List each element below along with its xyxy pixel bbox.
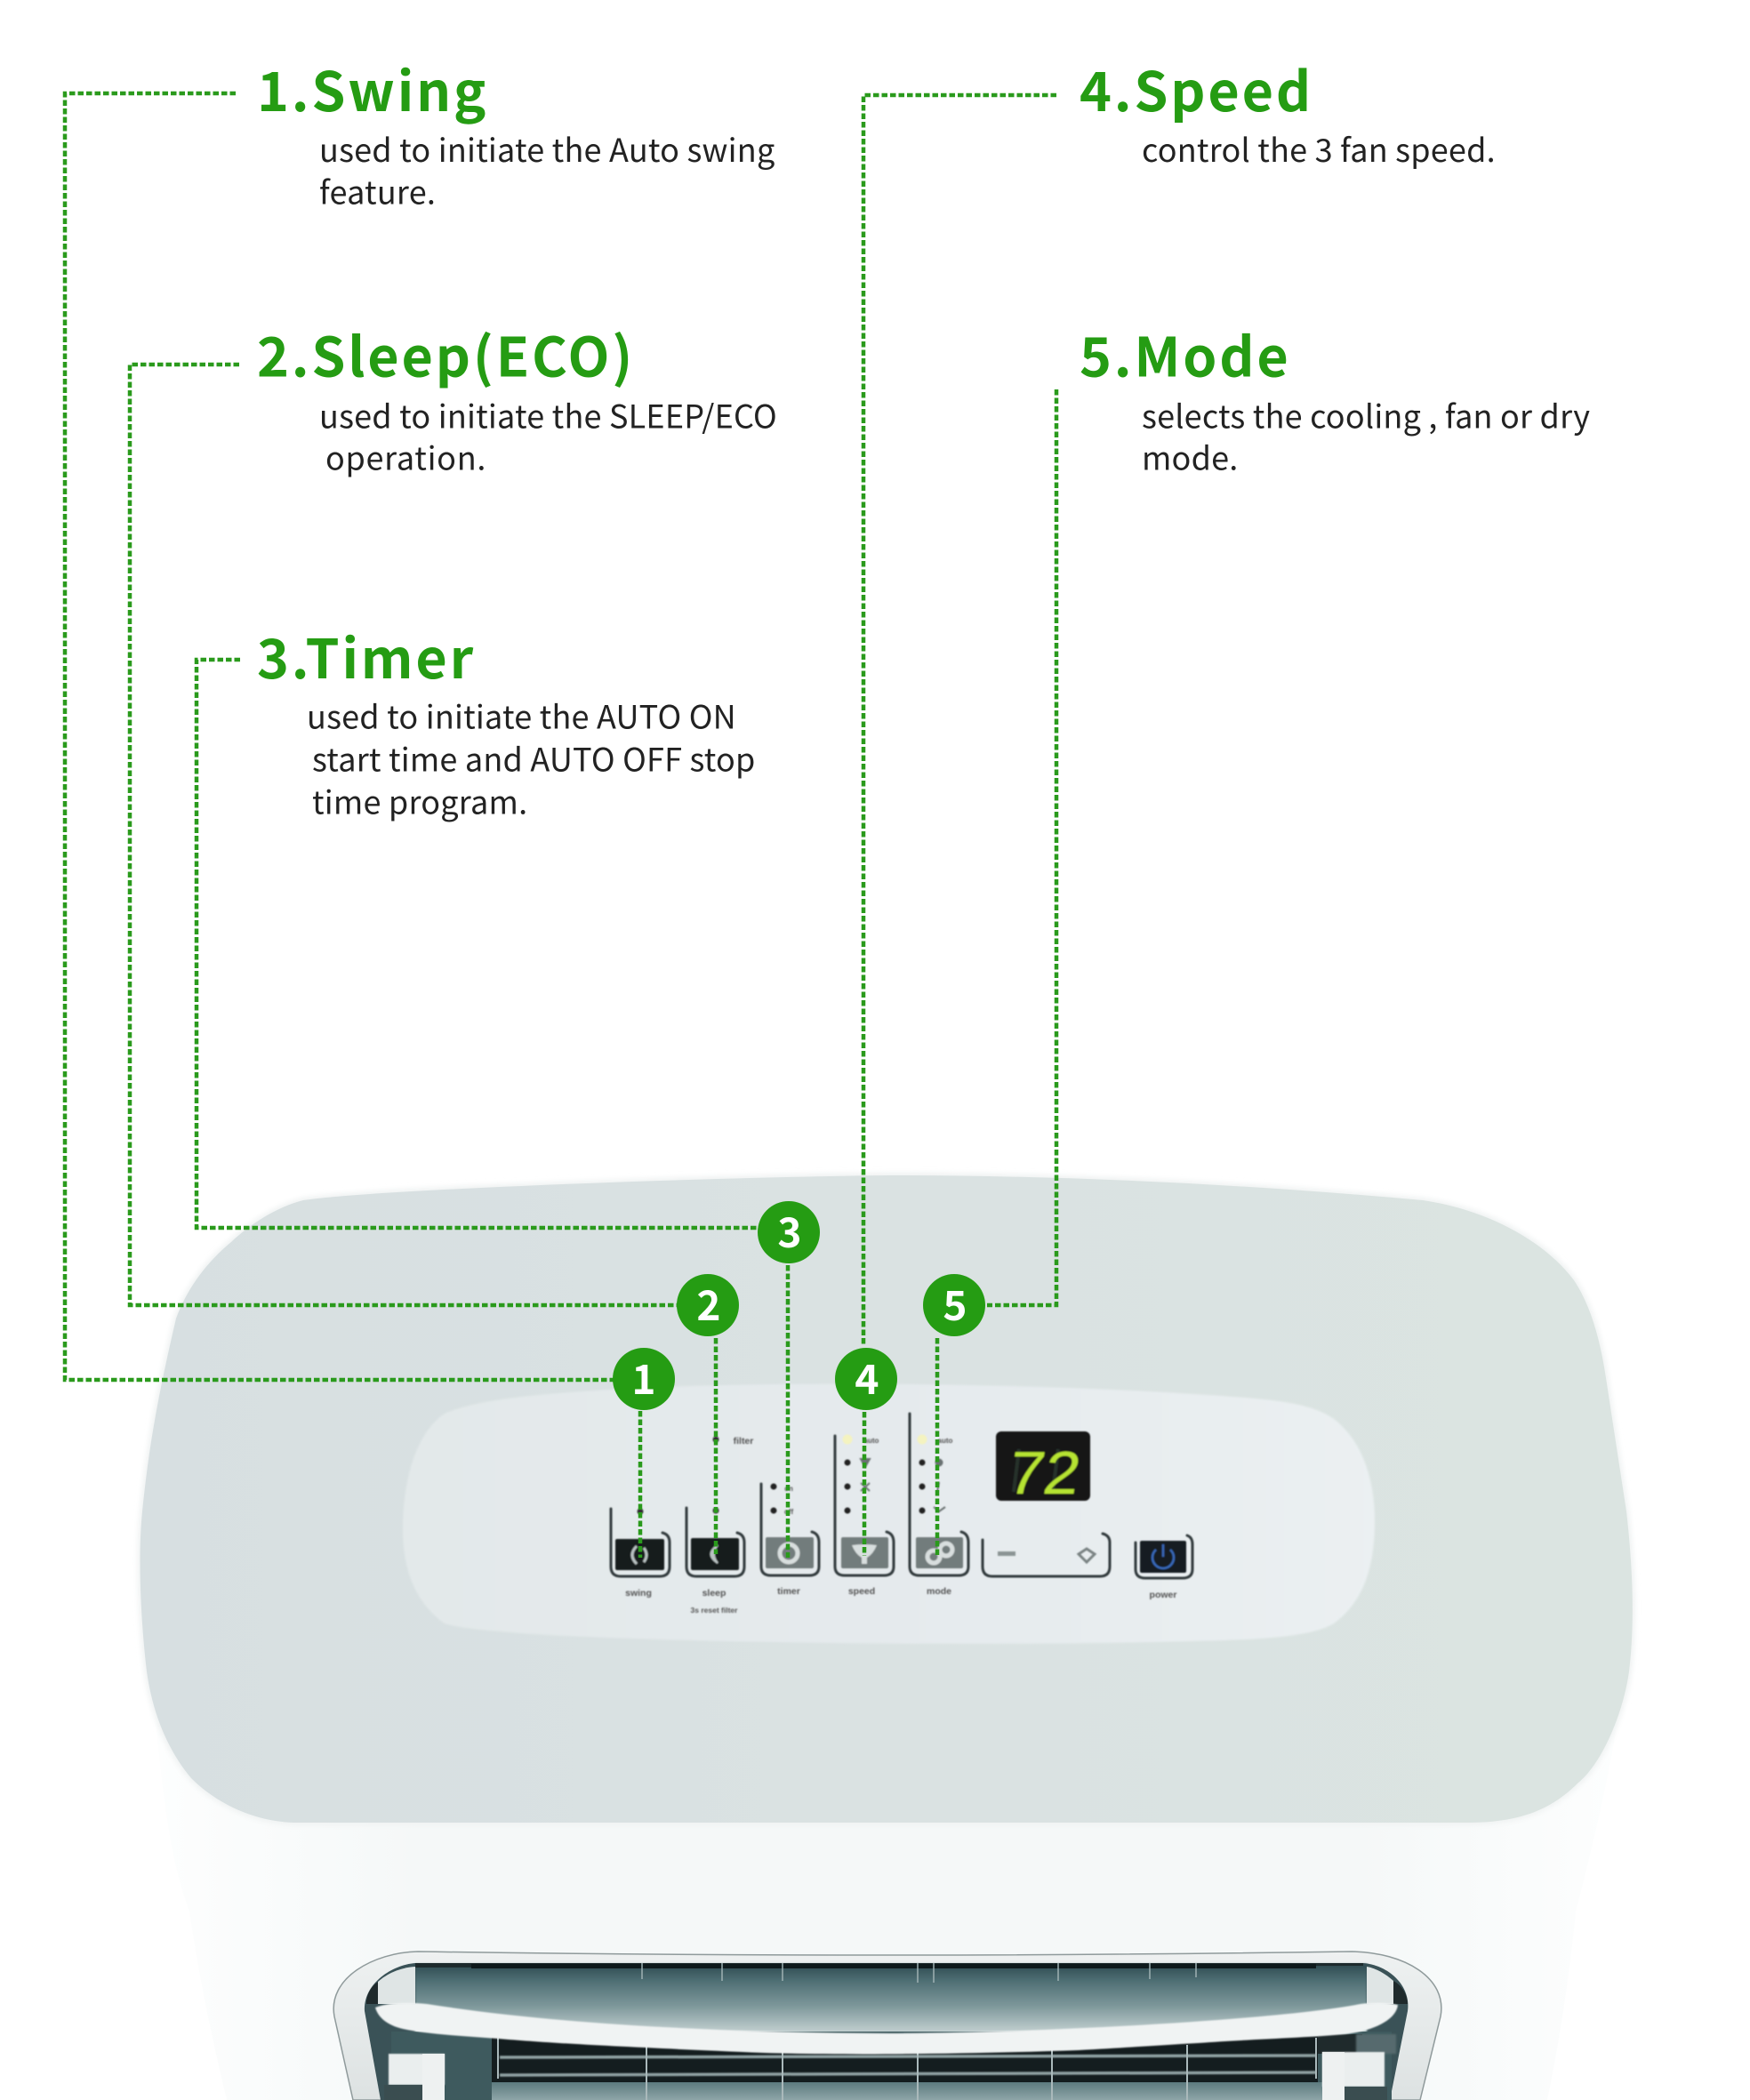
vent side panels	[384, 2034, 1396, 2100]
button: swing	[611, 1508, 670, 1599]
badge 3: 3	[777, 1201, 802, 1260]
badge 2	[677, 1274, 739, 1336]
lower grille	[391, 2032, 1392, 2100]
heading: speed: 4.Speed	[1080, 48, 1313, 127]
button: timer: timer	[777, 1586, 800, 1597]
pointer lines to buttons	[640, 1265, 937, 1558]
leader line 2	[130, 365, 678, 1305]
button: sleep: 3s reset filter	[691, 1606, 738, 1615]
upper vent interior	[415, 1964, 1367, 2048]
description: swing	[319, 125, 775, 213]
temperature display: 72	[1004, 1439, 1086, 1507]
description: sleep	[319, 391, 777, 480]
description: swing: feature.	[319, 167, 436, 213]
air conditioner unit	[140, 1175, 1633, 2100]
description: mode: selects the cooling , fan or dry	[1142, 391, 1590, 437]
heading: mode: 5.Mode	[1080, 313, 1291, 393]
button: swing: swing	[625, 1588, 652, 1599]
description: mode	[1142, 391, 1590, 480]
upper louver slot	[415, 1963, 1363, 1983]
badge 3	[758, 1201, 820, 1263]
badge 4: 4	[855, 1348, 879, 1407]
leader line 3	[197, 660, 759, 1228]
button: sleep: sleep	[702, 1588, 726, 1599]
description: timer: time program.	[312, 777, 527, 823]
button: power	[1136, 1535, 1192, 1600]
description: swing: used to initiate the Auto swing	[319, 125, 775, 172]
button: plus and minus	[983, 1534, 1110, 1576]
control panel face	[403, 1384, 1375, 1644]
vent bezel	[333, 1952, 1441, 2100]
upper corner pieces	[366, 1967, 1408, 2004]
button: sleep: filter	[734, 1436, 753, 1447]
description: speed: control the 3 fan speed.	[1142, 125, 1496, 172]
top housing	[140, 1175, 1633, 1823]
button: timer: off	[784, 1508, 793, 1516]
button: mode	[910, 1414, 968, 1597]
badge 1	[613, 1348, 675, 1410]
button: power: power	[1150, 1590, 1176, 1600]
description: timer	[307, 692, 756, 823]
button: speed: auto	[864, 1437, 879, 1445]
description: timer: start time and AUTO OFF stop	[312, 734, 756, 781]
description: sleep: operation.	[325, 434, 486, 480]
badge 1: 1	[631, 1348, 656, 1407]
unit body	[153, 1689, 1623, 2100]
leader line 1	[65, 93, 614, 1380]
badge 4	[835, 1348, 897, 1410]
description: mode: mode.	[1142, 434, 1239, 480]
heading: timer: 3.Timer	[257, 615, 476, 694]
air vent	[333, 1952, 1441, 2100]
description: timer: used to initiate the AUTO ON	[307, 692, 736, 738]
badge 5	[923, 1274, 985, 1336]
button: speed	[835, 1435, 894, 1597]
description: sleep: used to initiate the SLEEP/ECO	[319, 391, 777, 437]
leader line 5	[987, 389, 1056, 1305]
louver blade	[375, 2003, 1398, 2054]
leader line 4	[863, 95, 1056, 1345]
button: timer: on	[784, 1485, 793, 1493]
button: sleep	[686, 1436, 753, 1615]
heading: sleep: 2.Sleep(ECO)	[257, 313, 635, 393]
badge 5: 5	[943, 1274, 967, 1333]
button: timer	[761, 1483, 819, 1597]
button: mode: mode	[927, 1586, 951, 1597]
button: speed: speed	[848, 1586, 875, 1597]
heading: swing: 1.Swing	[257, 48, 488, 127]
badge 2: 2	[696, 1274, 721, 1333]
vent opening	[365, 1963, 1408, 2100]
button: mode: auto	[938, 1437, 953, 1445]
